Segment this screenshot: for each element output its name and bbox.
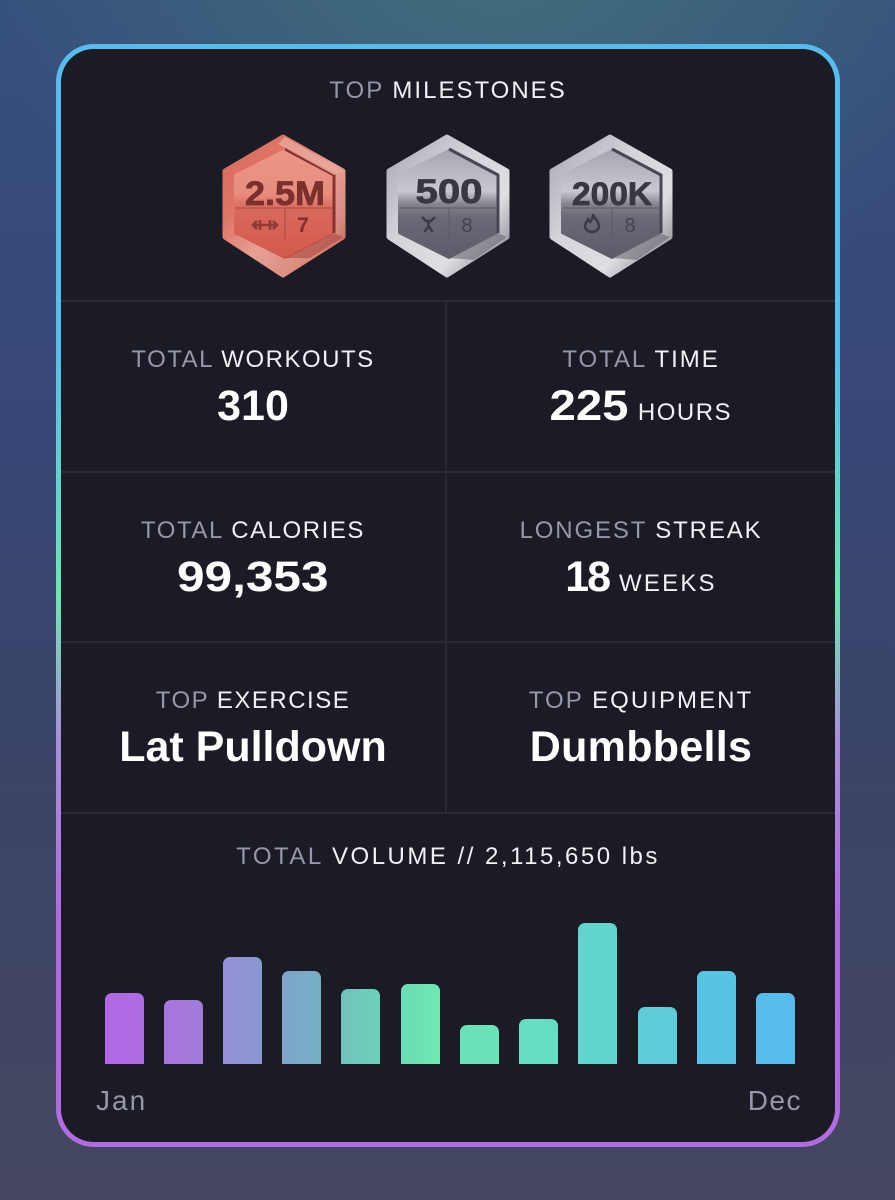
stat: top equipment: Dumbbells: [530, 723, 752, 771]
badge: 2.5M: 7: [297, 214, 309, 237]
badge: 2.5M: [225, 137, 343, 275]
heading: top milestones: TOP MILESTONES: [329, 77, 567, 104]
stat: top equipment: [529, 687, 753, 771]
stat: total workouts: [131, 346, 375, 430]
stat: top exercise: [119, 687, 387, 771]
axis label: Dec: Dec: [748, 1085, 802, 1116]
icon: flame: [585, 214, 599, 232]
stat: total time: [549, 346, 732, 430]
stat: top exercise: TOP EXERCISE: [156, 687, 350, 714]
stat: longest streak: [520, 517, 762, 601]
stat: longest streak: 18 WEEKS: [565, 553, 717, 601]
badge: 500: 500: [416, 173, 482, 211]
stat: total calories: [141, 517, 365, 601]
stat: total workouts: 310: [217, 382, 289, 430]
badge: 500: [389, 137, 507, 275]
icon: dumbbell: [253, 220, 277, 230]
stat: total time: HOURS: [638, 399, 732, 426]
stat: total calories: 99,353: [177, 553, 329, 601]
stat: total calories: TOTAL CALORIES: [141, 517, 365, 544]
stat: total time: 225: [549, 382, 628, 430]
axis label: Jan: Jan: [96, 1085, 147, 1116]
badge: 200K: 200K: [572, 176, 652, 212]
milestone badges: [222, 134, 672, 278]
badge: 200K: 8: [624, 215, 636, 237]
stat: top equipment: TOP EQUIPMENT: [529, 687, 753, 714]
badge: 200K: [552, 137, 670, 275]
badge: 2.5M: 2.5M: [245, 175, 325, 213]
bar chart: monthly volume: [105, 923, 795, 1064]
stat: top exercise: Lat Pulldown: [119, 723, 387, 771]
stat: longest streak: LONGEST STREAK: [520, 517, 762, 544]
heading: total volume: TOTAL VOLUME // 2,115,650 lbs: [236, 843, 660, 870]
stat: total time: TOTAL TIME: [562, 346, 720, 373]
stat: total workouts: TOTAL WORKOUTS: [131, 346, 375, 373]
badge: 500: 8: [461, 215, 473, 237]
icon: person: [422, 217, 435, 232]
